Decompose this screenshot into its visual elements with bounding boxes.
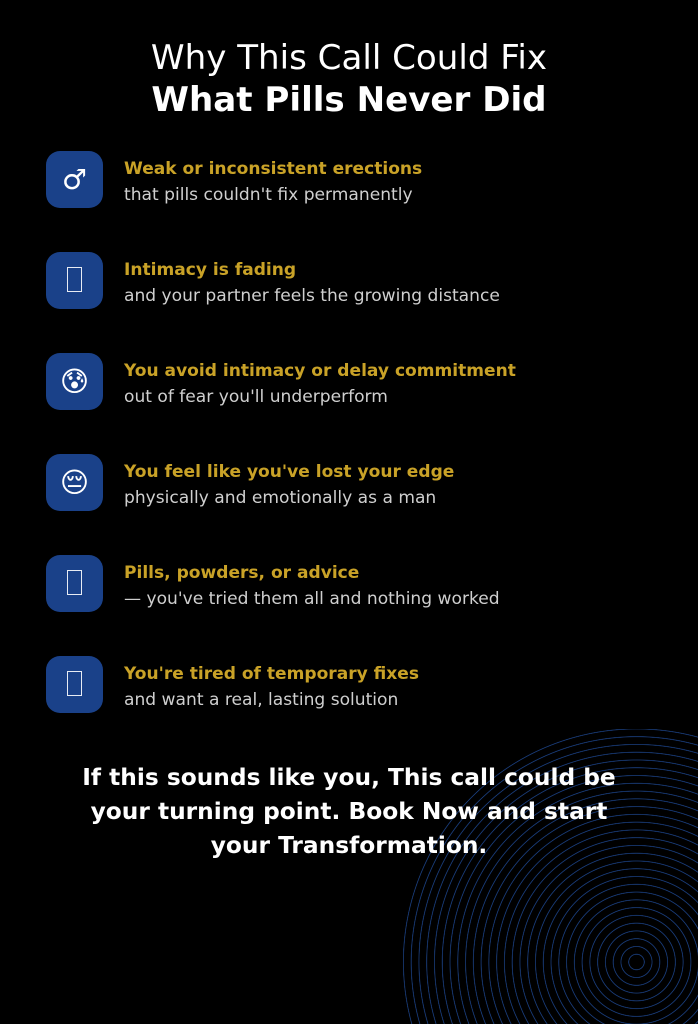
item heading: You feel like you've lost your edge [124, 462, 454, 482]
icon: anxious face [46, 353, 103, 410]
closing call to action: your turning point. Book Now and start [91, 798, 607, 825]
item heading: Weak or inconsistent erections [124, 159, 422, 179]
item heading: Pills, powders, or advice [124, 563, 359, 583]
item heading: You're tired of temporary fixes [124, 664, 419, 684]
title: Why This Call Could Fix [151, 38, 547, 78]
list item: intimacy fading [46, 252, 500, 309]
icon: missing glyph box [46, 555, 103, 612]
item text: — you've tried them all and nothing worked [124, 589, 500, 609]
closing call to action: If this sounds like you, This call could be [82, 764, 616, 791]
item text: and your partner feels the growing distance [124, 286, 500, 306]
closing call to action [82, 764, 616, 859]
list item: weak erections [46, 151, 422, 208]
item text: that pills couldn't fix permanently [124, 185, 413, 205]
icon: missing glyph box [46, 252, 103, 309]
item heading: Intimacy is fading [124, 260, 296, 280]
list item: avoid intimacy [46, 353, 516, 410]
icon: male sign: ♂ [62, 163, 87, 196]
item text: physically and emotionally as a man [124, 488, 436, 508]
item text: and want a real, lasting solution [124, 690, 398, 710]
icon: male sign [46, 151, 103, 208]
item heading: You avoid intimacy or delay commitment [124, 361, 516, 381]
list item: temporary fixes [46, 656, 419, 713]
closing call to action: your Transformation. [211, 832, 487, 859]
list item: lost edge [46, 454, 454, 511]
icon: anxious face: 😰 [60, 365, 89, 398]
icon: pensive face [46, 454, 103, 511]
title: What Pills Never Did [151, 80, 547, 120]
list item: pills and powders [46, 555, 500, 612]
background concentric rings [403, 729, 698, 1024]
title [151, 38, 547, 120]
icon: missing glyph box [46, 656, 103, 713]
item text: out of fear you'll underperform [124, 387, 388, 407]
icon: pensive face: 😔 [60, 466, 89, 499]
